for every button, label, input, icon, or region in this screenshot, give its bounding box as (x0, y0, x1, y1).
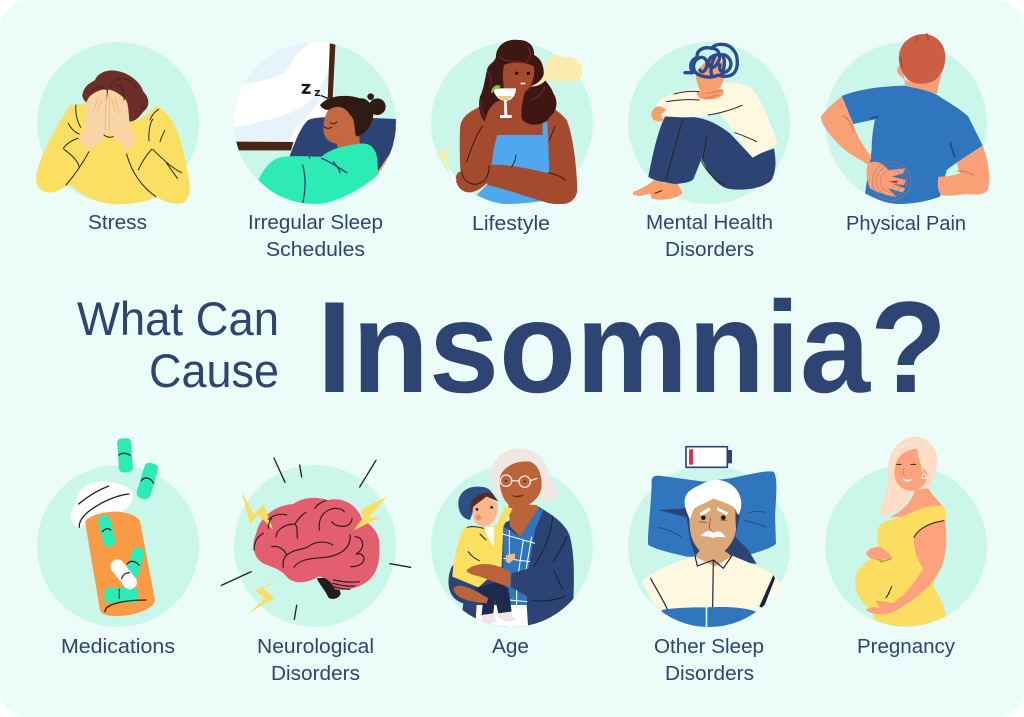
icon: person asleep by a window (230, 40, 397, 205)
circle: lifestyle (431, 42, 593, 204)
circle: physical pain (825, 42, 987, 204)
panel: physical pain (821, 33, 989, 235)
icon: brain with lightning bolts (221, 458, 411, 619)
panel: stress (36, 42, 199, 234)
panel: lifestyle (431, 40, 593, 235)
label: pregnancy: Pregnancy (857, 636, 955, 658)
icon: woman with drink and cigarette (440, 40, 582, 204)
icon: man holding his lower back (821, 33, 989, 204)
panel: medications (37, 438, 199, 658)
label: medications: Medications (61, 636, 175, 658)
heading: insomnia: Insomnia? (317, 274, 947, 420)
icon: pregnant woman (855, 437, 946, 626)
icon: woman covering face (36, 70, 190, 204)
panel: other sleep disorders (628, 447, 790, 685)
circle: sleep (234, 42, 396, 204)
label: physical pain: Physical Pain (846, 213, 966, 235)
icon: spilled pill bottle (70, 438, 159, 616)
panel: neurological disorders (221, 458, 411, 685)
label: irregular sleep schedules: Schedules (266, 239, 365, 261)
circle: neurological (234, 465, 396, 627)
circle: other sleep (628, 465, 790, 627)
label: mental health disorders: Mental Health (646, 212, 773, 234)
label: neurological disorders: Disorders (271, 663, 360, 685)
panel: age (431, 448, 593, 658)
panel: irregular sleep schedules (230, 40, 397, 261)
title (77, 274, 947, 420)
circle: stress (37, 42, 199, 204)
circle: pregnancy (825, 465, 987, 627)
label: neurological disorders: Neurological (257, 636, 374, 658)
panel: mental health disorders (628, 42, 790, 261)
icon: grandmother holding child (448, 448, 574, 630)
circle: medications (37, 465, 199, 627)
label: lifestyle: Lifestyle (472, 213, 550, 235)
panel: pregnancy (825, 437, 987, 658)
label: age: Age (492, 636, 529, 658)
icon: person hugging knees with tangled thoughts (633, 44, 777, 200)
icon: tired man on pillow with low battery (642, 447, 782, 630)
circle: age (431, 465, 593, 627)
label: other sleep disorders: Disorders (665, 663, 754, 685)
circle: mental health (628, 42, 790, 204)
label: other sleep disorders: Other Sleep (654, 636, 764, 658)
label: stress: Stress (88, 212, 147, 234)
heading: what can cause: What Can (77, 292, 279, 345)
label: irregular sleep schedules: Irregular Sleep (248, 212, 383, 234)
label: mental health disorders: Disorders (665, 239, 754, 261)
heading: what can cause: Cause (149, 344, 279, 397)
